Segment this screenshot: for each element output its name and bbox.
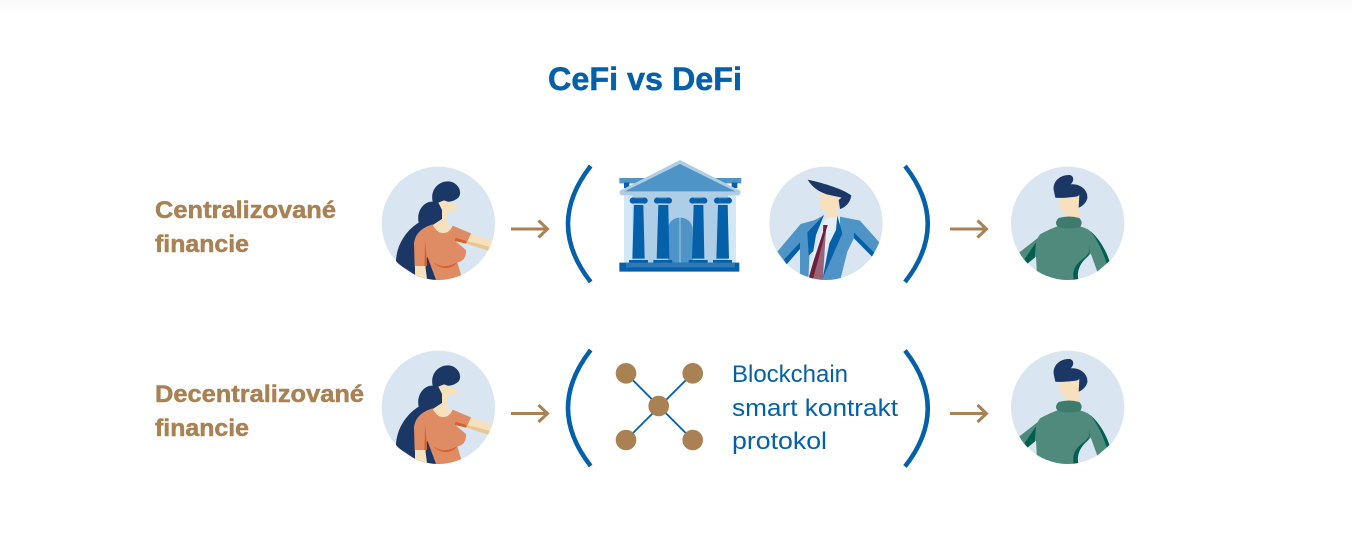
right bracket, row 2: [905, 350, 928, 466]
text: blockchain, smart contract, protocol: [732, 361, 898, 455]
label: centralized finance: Centralizované: [155, 197, 336, 224]
icon: woman sender, row 1: [382, 167, 495, 282]
arrow, row 1 right: [950, 220, 986, 238]
arrow, row 1 left: [511, 220, 548, 238]
arrow, row 2 left: [511, 405, 548, 422]
label: decentralized finance: financie: [155, 415, 249, 442]
label: decentralized finance: Decentralizované: [155, 381, 364, 408]
icon: network nodes: [616, 363, 703, 450]
title: CeFi vs DeFi: [548, 61, 742, 97]
label: centralized finance: financie: [155, 231, 249, 258]
icon: recipient, row 2: [1011, 351, 1124, 466]
left bracket, row 1: [568, 166, 591, 282]
icon: bank: [619, 160, 741, 272]
text: blockchain, smart contract, protocol: smart kontrakt: [732, 395, 898, 422]
label: decentralized finance: [155, 381, 364, 442]
infographic: [155, 66, 1124, 468]
label: centralized finance: [155, 197, 336, 258]
icon: man, intermediary: [769, 167, 883, 282]
icon: recipient, row 1: [1011, 167, 1124, 282]
icon: woman sender, row 2: [382, 351, 495, 466]
text: blockchain, smart contract, protocol: Blockchain: [732, 361, 848, 388]
left bracket, row 2: [568, 350, 591, 466]
text: blockchain, smart contract, protocol: protokol: [732, 428, 827, 455]
arrow, row 2 right: [950, 405, 986, 422]
right bracket, row 1: [905, 166, 928, 282]
